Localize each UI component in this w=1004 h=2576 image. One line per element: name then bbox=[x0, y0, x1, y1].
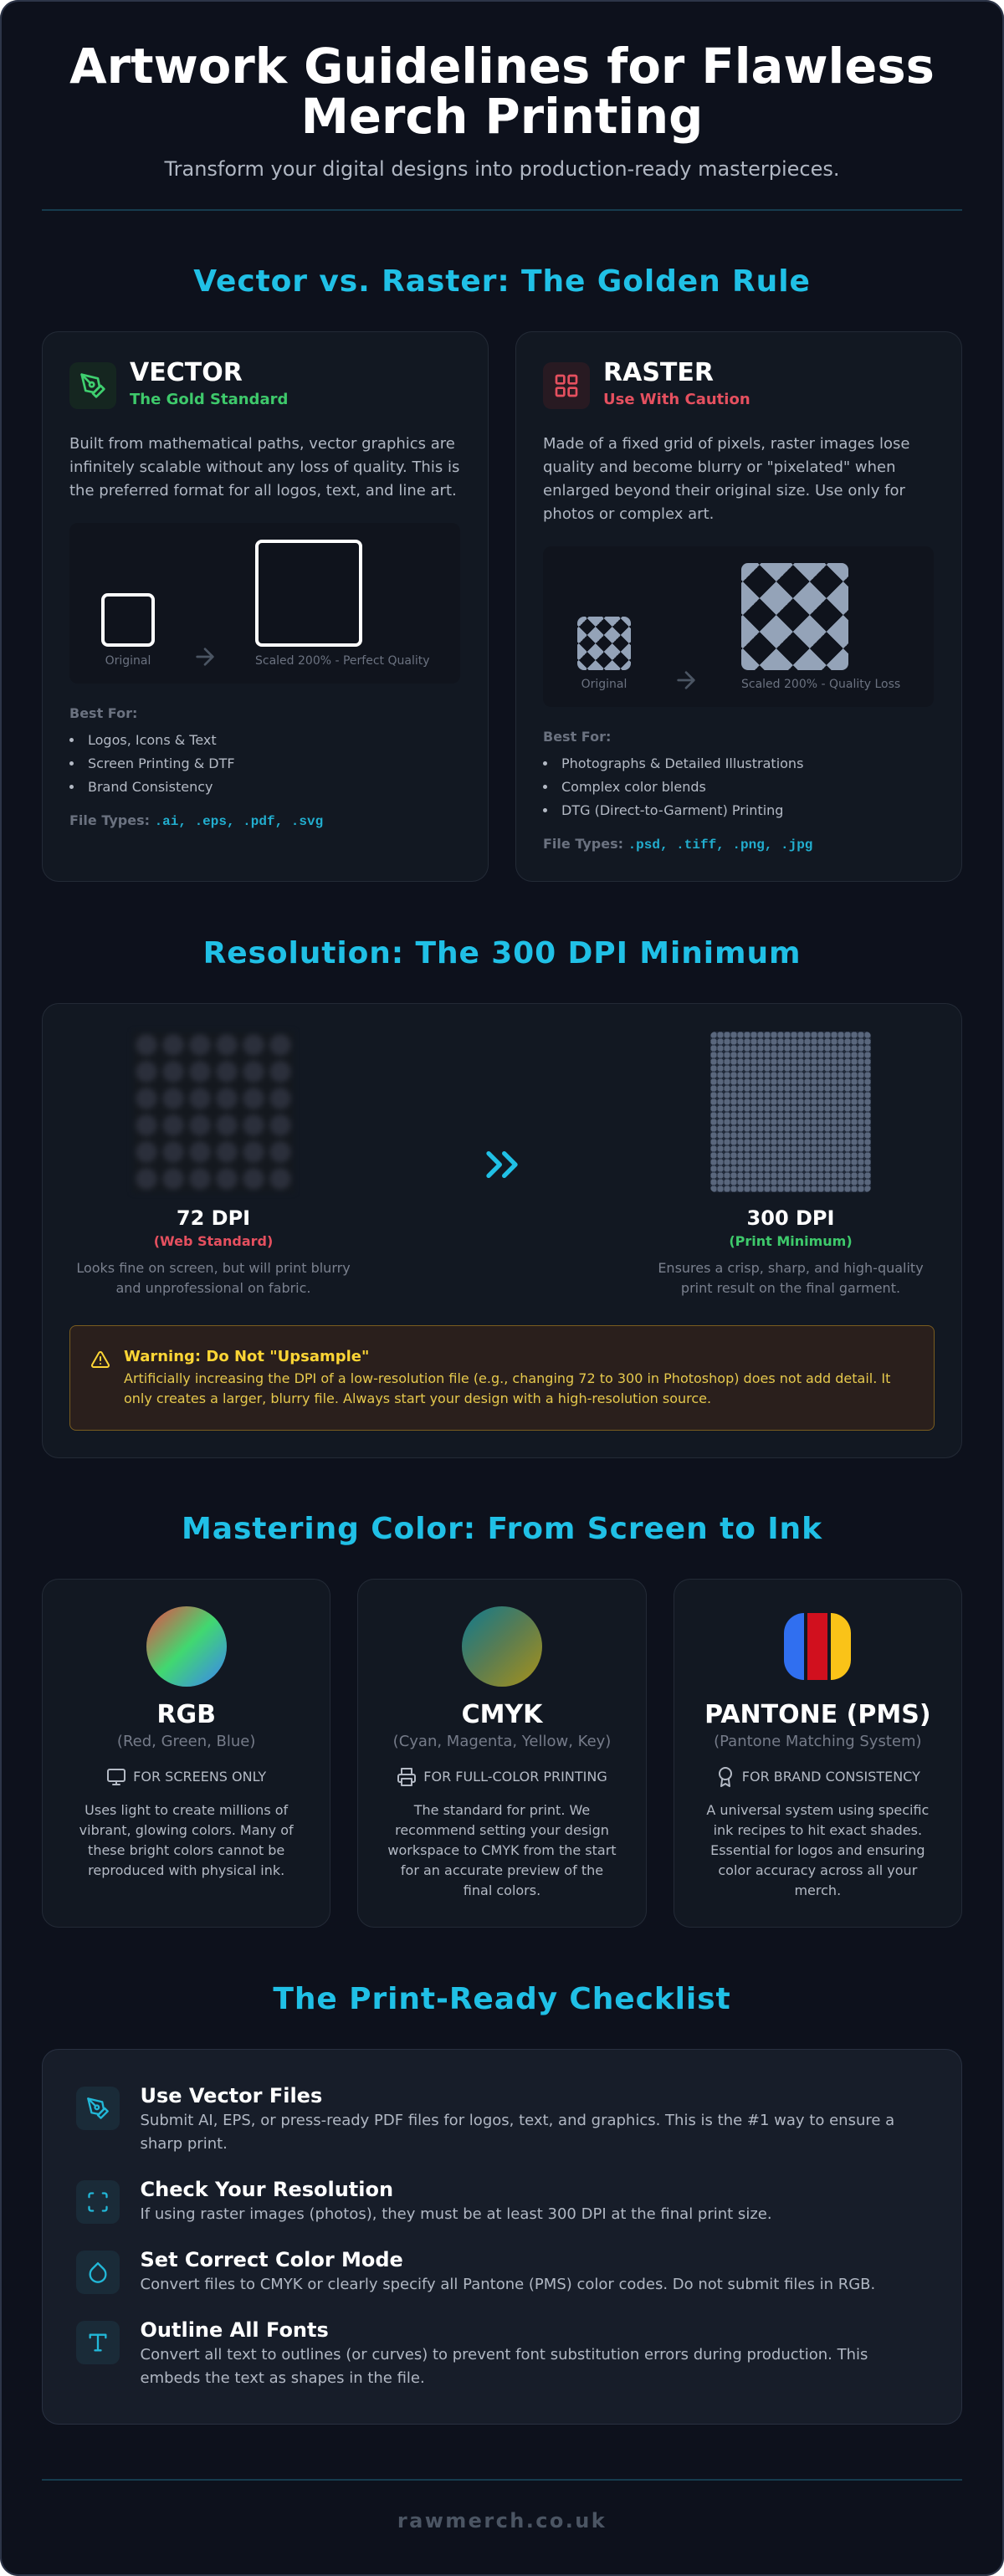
item text: embeds the text as shapes in the file. bbox=[141, 2369, 425, 2387]
rgb description: vibrant, glowing colors. Many of bbox=[79, 1822, 294, 1838]
72 dpi sublabel: (Web Standard) bbox=[154, 1233, 273, 1248]
72 dpi description bbox=[76, 1260, 351, 1296]
vector description: infinitely scalable without any loss of quality. This is bbox=[69, 458, 459, 476]
subtitle: Transform your digital designs into production-ready masterpieces. bbox=[164, 157, 839, 181]
vector scaling demo bbox=[69, 523, 460, 684]
scaled vector square bbox=[255, 540, 362, 647]
warning text: only creates a larger, blurry file. Always start your design with a high-resolution source. bbox=[124, 1390, 711, 1406]
raster description: Made of a fixed grid of pixels, raster images lose bbox=[543, 435, 909, 453]
arrow bbox=[196, 648, 214, 666]
panel: raster bbox=[515, 331, 962, 882]
rgb use tag: FOR SCREENS ONLY bbox=[133, 1769, 266, 1785]
original raster square bbox=[577, 617, 631, 670]
pantone use tag bbox=[719, 1767, 920, 1787]
heading: color: Mastering Color: From Screen to Ink bbox=[182, 1512, 822, 1546]
raster description: photos or complex art. bbox=[543, 505, 714, 523]
300 dpi sample bbox=[710, 1032, 871, 1192]
warning text: Artificially increasing the DPI of a low-resolution file (e.g., changing 72 to 300 in Photoshop) does not add detail. It bbox=[124, 1370, 890, 1386]
best for list bbox=[69, 731, 235, 795]
best for list: Complex color blends bbox=[561, 778, 706, 795]
vector description bbox=[69, 435, 459, 499]
300 dpi description bbox=[658, 1260, 924, 1296]
checklist item: color mode bbox=[76, 2248, 875, 2294]
item title: Set Correct Color Mode bbox=[141, 2248, 403, 2271]
item title: Use Vector Files bbox=[141, 2084, 322, 2107]
pantone expansion: (Pantone Matching System) bbox=[714, 1732, 922, 1750]
raster description: enlarged beyond their original size. Use only for bbox=[543, 482, 905, 499]
best for heading: Best For: bbox=[69, 705, 137, 721]
icon: pen tool bbox=[69, 362, 116, 409]
best for list: Logos, Icons & Text bbox=[88, 731, 217, 748]
pantone description bbox=[706, 1802, 929, 1898]
rgb description: reproduced with physical ink. bbox=[88, 1862, 284, 1878]
icon: double chevron bbox=[486, 1151, 518, 1178]
label: original: Original bbox=[581, 678, 627, 691]
warning text bbox=[124, 1370, 890, 1406]
best for list bbox=[543, 755, 803, 818]
item title: Check Your Resolution bbox=[141, 2178, 393, 2201]
panel: cmyk bbox=[357, 1579, 647, 1928]
raster name: RASTER bbox=[603, 358, 714, 387]
rgb description: Uses light to create millions of bbox=[85, 1802, 288, 1818]
best for heading: Best For: bbox=[543, 729, 611, 745]
pantone swatch bbox=[784, 1613, 851, 1680]
pantone name: PANTONE (PMS) bbox=[704, 1700, 931, 1729]
item title: Outline All Fonts bbox=[141, 2318, 329, 2342]
item text: If using raster images (photos), they must be at least 300 DPI at the final print size. bbox=[141, 2205, 772, 2223]
icon: pen tool bbox=[76, 2087, 120, 2130]
pantone description: ink recipes to hit exact shades. bbox=[714, 1822, 922, 1838]
72 dpi label: 72 DPI bbox=[177, 1206, 250, 1230]
title: Merch Printing bbox=[301, 89, 703, 145]
72 dpi description: Looks fine on screen, but will print blurry bbox=[76, 1260, 351, 1276]
heading: resolution: Resolution: The 300 DPI Minimum bbox=[203, 936, 801, 970]
label: original: Original bbox=[105, 654, 151, 668]
cmyk description: final colors. bbox=[464, 1882, 540, 1898]
icon: scan frame bbox=[76, 2180, 120, 2224]
cmyk description: recommend setting your design bbox=[395, 1822, 609, 1838]
title bbox=[69, 38, 935, 145]
raster description bbox=[543, 435, 909, 523]
title: Artwork Guidelines for Flawless bbox=[69, 38, 935, 95]
vector name: VECTOR bbox=[130, 358, 243, 387]
checklist item: fonts bbox=[76, 2318, 868, 2387]
raster tagline: Use With Caution bbox=[603, 391, 750, 408]
300 dpi label: 300 DPI bbox=[747, 1206, 834, 1230]
raster description: quality and become blurry or "pixelated" when bbox=[543, 458, 896, 476]
cmyk description: for an accurate preview of the bbox=[401, 1862, 603, 1878]
icon: type bbox=[76, 2321, 120, 2364]
cmyk use tag: FOR FULL-COLOR PRINTING bbox=[423, 1769, 607, 1785]
cmyk description: workspace to CMYK from the start bbox=[387, 1842, 617, 1858]
cmyk swatch bbox=[462, 1606, 542, 1687]
callout: upsample warning bbox=[69, 1325, 935, 1431]
cmyk description: The standard for print. We bbox=[414, 1802, 590, 1818]
pantone description: color accuracy across all your bbox=[718, 1862, 917, 1878]
vector description: the preferred format for all logos, text, and line art. bbox=[69, 482, 457, 499]
panel: rgb bbox=[42, 1579, 330, 1928]
pantone description: merch. bbox=[794, 1882, 841, 1898]
heading: vector vs raster: Vector vs. Raster: The Golden Rule bbox=[193, 264, 811, 299]
item text: Convert files to CMYK or clearly specify all Pantone (PMS) color codes. Do not submit files in RGB. bbox=[141, 2276, 875, 2293]
pantone description: A universal system using specific bbox=[706, 1802, 929, 1818]
rgb description bbox=[79, 1802, 294, 1878]
scaled raster square bbox=[741, 563, 848, 670]
72 dpi sample bbox=[133, 1032, 294, 1192]
panel: resolution bbox=[42, 1003, 962, 1458]
vector tagline: The Gold Standard bbox=[130, 391, 288, 408]
best for list: Screen Printing & DTF bbox=[88, 755, 235, 771]
cmyk expansion: (Cyan, Magenta, Yellow, Key) bbox=[393, 1732, 611, 1750]
checklist item: resolution bbox=[76, 2178, 772, 2224]
rgb swatch bbox=[146, 1606, 227, 1687]
pantone use tag: FOR BRAND CONSISTENCY bbox=[742, 1769, 920, 1785]
icon: grid bbox=[543, 362, 590, 409]
best for list: DTG (Direct-to-Garment) Printing bbox=[561, 801, 783, 818]
original vector square bbox=[101, 593, 155, 647]
arrow bbox=[677, 671, 695, 689]
best for list: Photographs & Detailed Illustrations bbox=[561, 755, 803, 771]
icon: droplet bbox=[76, 2251, 120, 2294]
warning title: Warning: Do Not "Upsample" bbox=[124, 1348, 369, 1365]
panel: pantone bbox=[674, 1579, 962, 1928]
label: scaled: Scaled 200% - Perfect Quality bbox=[255, 654, 430, 668]
72 dpi description: and unprofessional on fabric. bbox=[115, 1280, 311, 1296]
rgb name: RGB bbox=[156, 1700, 216, 1729]
cmyk description bbox=[387, 1802, 617, 1898]
icon: warning triangle bbox=[91, 1351, 110, 1368]
file types: File Types: .ai, .eps, .pdf, .svg bbox=[69, 812, 323, 829]
best for list: Brand Consistency bbox=[88, 778, 213, 795]
panel: checklist bbox=[42, 2049, 962, 2425]
pantone description: Essential for logos and ensuring bbox=[710, 1842, 925, 1858]
footer: rawmerch.co.uk bbox=[397, 2509, 607, 2532]
label: scaled: Scaled 200% - Quality Loss bbox=[741, 678, 900, 691]
300 dpi description: print result on the final garment. bbox=[681, 1280, 900, 1296]
item text: Convert all text to outlines (or curves) to prevent font substitution errors during production. This bbox=[141, 2346, 868, 2363]
checklist item: vector files bbox=[76, 2084, 894, 2153]
300 dpi description: Ensures a crisp, sharp, and high-quality bbox=[658, 1260, 924, 1276]
raster scaling demo bbox=[543, 546, 934, 707]
panel: vector bbox=[42, 331, 489, 882]
file types: File Types: .psd, .tiff, .png, .jpg bbox=[543, 836, 812, 853]
heading: checklist: The Print-Ready Checklist bbox=[273, 1982, 731, 2016]
item text: sharp print. bbox=[141, 2135, 228, 2153]
item text bbox=[141, 2112, 894, 2153]
item text: Submit AI, EPS, or press-ready PDF files for logos, text, and graphics. This is the #1 way to ensure a bbox=[141, 2112, 894, 2129]
rgb expansion: (Red, Green, Blue) bbox=[117, 1732, 255, 1750]
cmyk name: CMYK bbox=[462, 1700, 542, 1729]
300 dpi sublabel: (Print Minimum) bbox=[729, 1233, 853, 1248]
rgb description: these bright colors cannot be bbox=[88, 1842, 284, 1858]
item text bbox=[141, 2346, 868, 2387]
vector description: Built from mathematical paths, vector graphics are bbox=[69, 435, 455, 453]
